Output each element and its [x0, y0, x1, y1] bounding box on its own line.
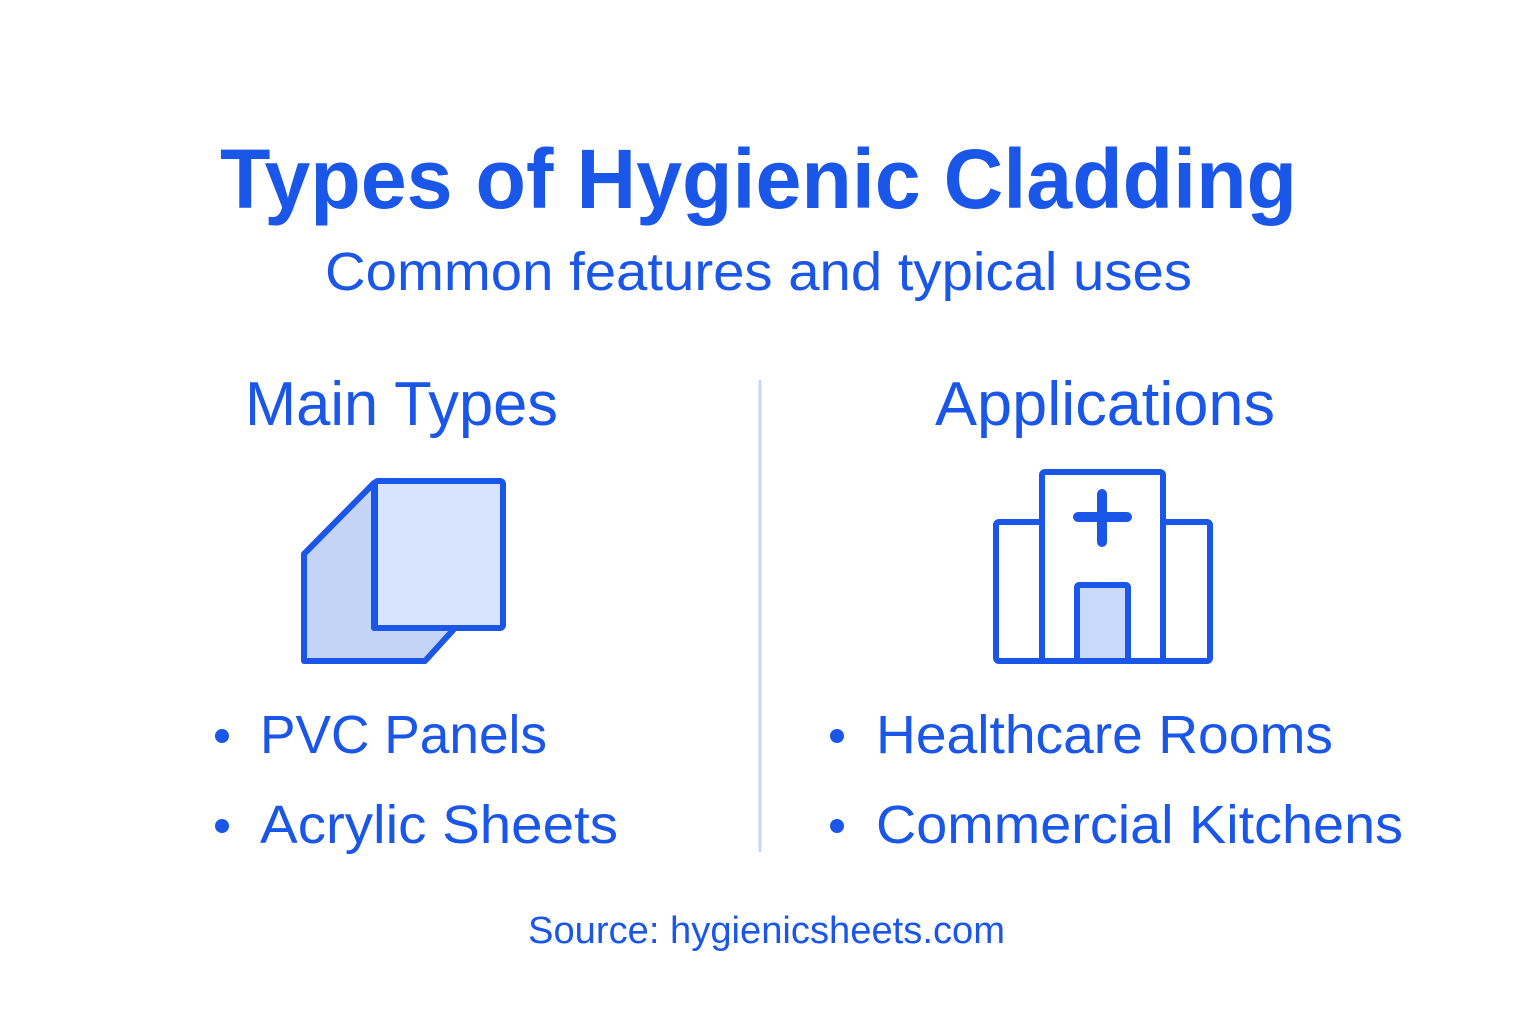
icon: panels	[304, 481, 503, 661]
bullet list: types	[215, 705, 618, 855]
source: Source: hygienicsheets.com	[528, 910, 1005, 952]
subtitle: Common features and typical uses	[325, 242, 1192, 302]
heading: main types: Main Types	[245, 370, 558, 439]
bullet list: applications: Commercial Kitchens	[876, 795, 1403, 855]
heading: applications: Applications	[935, 370, 1275, 439]
panel: applications	[830, 370, 1403, 855]
icon: hospital	[996, 472, 1210, 661]
panel: main types	[215, 370, 618, 855]
bullet list: types: Acrylic Sheets	[260, 795, 618, 855]
title: Types of Hygienic Cladding	[220, 132, 1297, 226]
bullet list: types: PVC Panels	[260, 705, 547, 765]
bullet list: applications	[830, 705, 1403, 855]
bullet list: applications: Healthcare Rooms	[876, 705, 1333, 765]
